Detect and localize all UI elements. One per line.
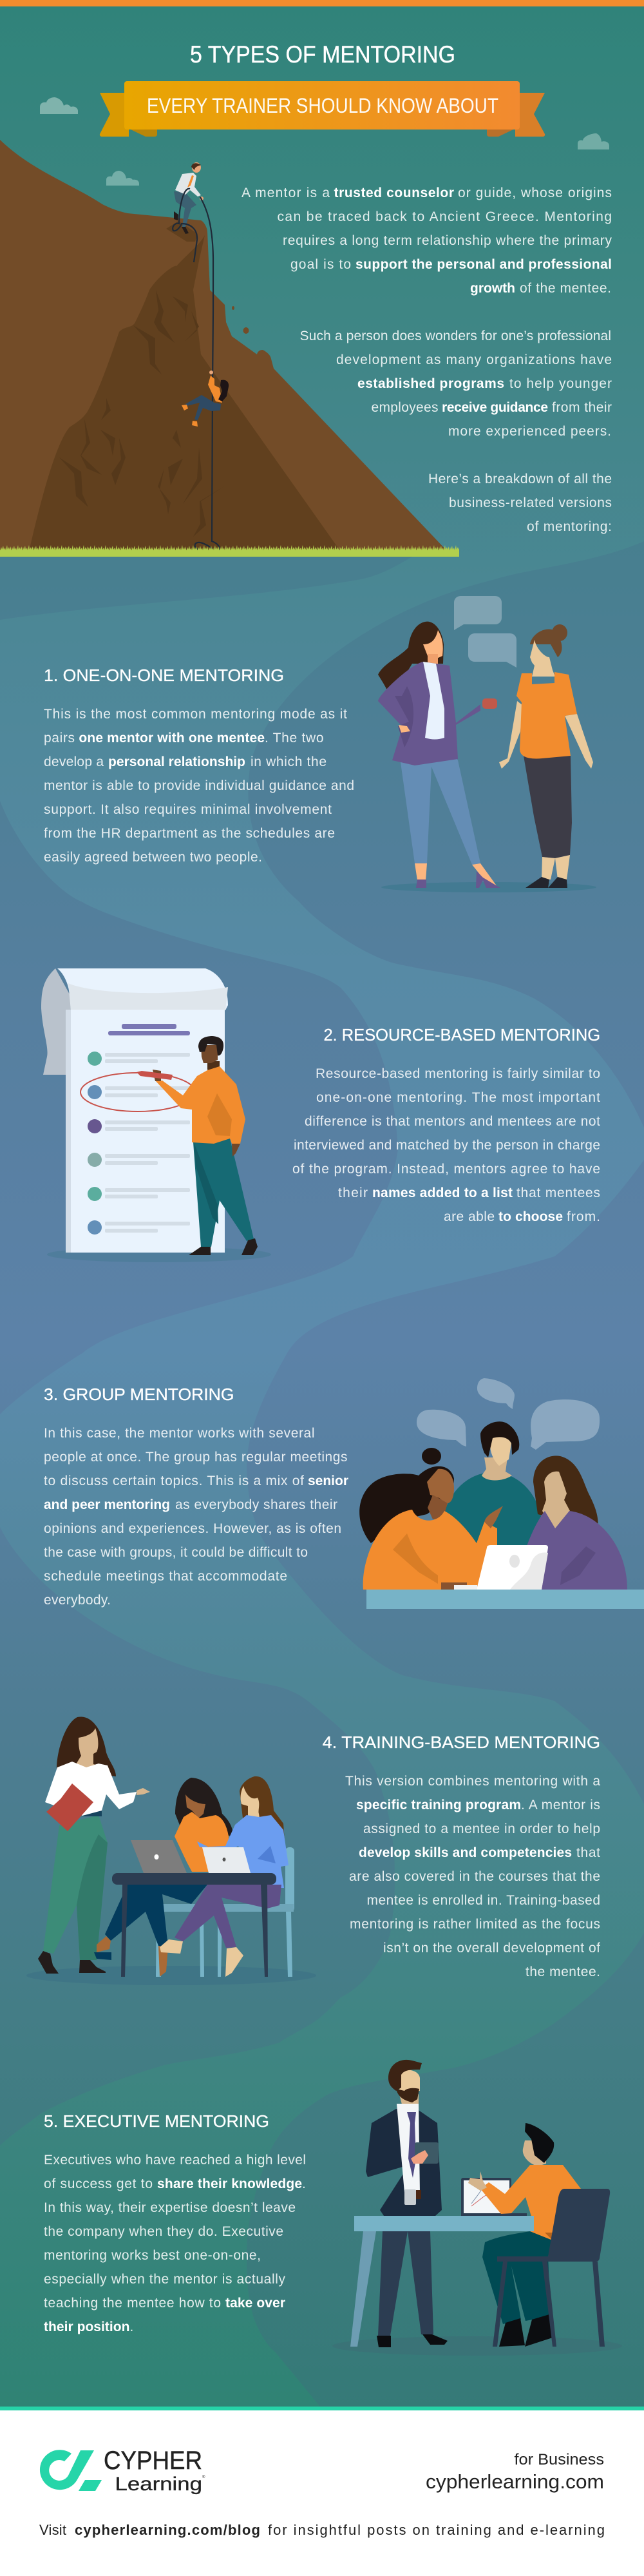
intro text: requires a long term relationship where the primary [283, 233, 612, 248]
cloud icon right [578, 133, 609, 149]
section 1 text [44, 707, 354, 865]
section 3 text: people at once. The group has regular meetings [44, 1450, 348, 1465]
section 3 text: and peer mentoring [44, 1497, 170, 1512]
illustration: list and man with marker [41, 968, 271, 1262]
illustration: cliff with climbers [0, 140, 448, 555]
paper sheet [66, 1010, 225, 1253]
section 1 text: . The two [265, 731, 323, 745]
section 3 text: opinions and experiences. However, as is often [44, 1521, 341, 1536]
intro text: growth [470, 281, 515, 296]
intro text: of the mentee. [520, 281, 611, 296]
website: cypherlearning.com [426, 2470, 604, 2493]
blog line: for insightful posts on training and e-learning [268, 2522, 605, 2538]
ground shadow [47, 1247, 271, 1262]
section 4 text: the mentee. [526, 1965, 600, 1979]
intro text: development as many organizations have [336, 352, 612, 367]
main rope [193, 197, 220, 555]
laptop [454, 1545, 548, 1590]
logo wordmark: ® [202, 2475, 205, 2479]
title: 5 TYPES OF MENTORING [190, 41, 455, 68]
speech bubble 1 [454, 596, 502, 630]
section 3 text: In this case, the mentor works with several [44, 1426, 314, 1441]
section 1 text: support. It also requires minimal involvement [44, 802, 332, 817]
mentor figure [174, 162, 204, 234]
ribbon banner [100, 81, 545, 137]
woman in orange [499, 624, 593, 888]
section 2 text: their [338, 1186, 368, 1200]
section 5 text: In this way, their expertise doesn’t leave [44, 2200, 296, 2215]
grass [0, 545, 459, 557]
section 2 text: Resource-based mentoring is fairly similar to [316, 1066, 600, 1081]
intro text: A mentor is a [242, 186, 330, 200]
top orange bar [0, 0, 644, 6]
woman in purple [515, 1456, 627, 1590]
intro text: of mentoring: [527, 519, 612, 534]
grey laptop [131, 1840, 187, 1873]
section 1 text: from the HR department as the schedules are [44, 826, 335, 841]
section 4 text: mentee is enrolled in. Training-based [367, 1893, 600, 1908]
woman with cup [378, 622, 500, 888]
section 1 text: pairs [44, 731, 75, 745]
standing executive [366, 2060, 448, 2347]
section 2 text: interviewed and matched by the person in charge [294, 1138, 600, 1153]
section 3 text [44, 1426, 348, 1608]
section 3 text: the case with groups, it could be difficult to [44, 1545, 308, 1560]
intro text: business-related versions [449, 495, 612, 510]
section 4 text: This version combines mentoring with a [345, 1774, 600, 1789]
section 1 text: develop a [44, 755, 104, 769]
section 1 text: in which the [251, 755, 327, 769]
section 4 heading: 4. TRAINING-BASED MENTORING [323, 1733, 600, 1752]
climbing woman [182, 370, 229, 427]
mountain shadow [29, 235, 341, 552]
section 2 text: that mentees [516, 1186, 600, 1200]
ground shadow [381, 882, 596, 892]
section 1 text: personal relationship [108, 755, 245, 769]
speech bubble 2 [468, 633, 516, 668]
section 2 text: one-on-one mentoring. The most important [316, 1090, 600, 1105]
section 5 text: share their knowledge [157, 2177, 302, 2191]
section 5 text: their position [44, 2320, 130, 2334]
table [366, 1590, 644, 1609]
ground shadow [26, 1966, 316, 1985]
section 2 text: to choose [498, 1209, 563, 1224]
section 4 text: specific training program [356, 1798, 521, 1812]
section 5 text: Executives who have reached a high level [44, 2153, 306, 2167]
speech bubble top [477, 1378, 515, 1409]
section 5 heading: 5. EXECUTIVE MENTORING [44, 2111, 269, 2131]
illustration: group of three [359, 1378, 644, 1609]
section 1 text: This is the most common mentoring mode as it [44, 707, 347, 722]
speech bubble right [531, 1399, 600, 1450]
section 3 text: as everybody shares their [175, 1497, 337, 1512]
section 4 text: are also covered in the courses that the [349, 1869, 600, 1884]
logo wordmark: Learning [115, 2474, 202, 2495]
section 5 text: teaching the mentee how to [44, 2296, 221, 2311]
woman in orange top [94, 1778, 233, 1977]
section 2 heading: 2. RESOURCE-BASED MENTORING [323, 1025, 600, 1044]
chair [156, 1847, 294, 1977]
rock cracks [59, 290, 224, 537]
section 5 text: mentoring works best one-on-one, [44, 2248, 261, 2263]
section 4 text: . A mentor is [521, 1798, 600, 1812]
blog line: cypherlearning.com/blog [75, 2522, 260, 2538]
intro text: Here’s a breakdown of all the [428, 472, 612, 486]
section 1 text: mentor is able to provide individual guidance and [44, 778, 354, 793]
section 3 text: everybody. [44, 1593, 111, 1608]
chair [493, 2189, 610, 2347]
section 5 text [44, 2153, 306, 2334]
mountain [0, 140, 448, 552]
intro text: employees [371, 400, 438, 415]
section 3 heading: 3. GROUP MENTORING [44, 1385, 234, 1404]
section 1 heading: 1. ONE-ON-ONE MENTORING [44, 666, 284, 685]
figure shadow [166, 221, 198, 242]
ground shadow [332, 2336, 622, 2356]
footer [0, 2407, 644, 2576]
intro text: support the personal and professional [355, 257, 612, 272]
speech bubble left [417, 1410, 466, 1447]
logo icon [40, 2450, 102, 2491]
list heading bars [122, 1024, 176, 1029]
section 3 text: senior [308, 1474, 348, 1488]
illustration: training at a table [26, 1716, 316, 1985]
section 2 text [292, 1066, 600, 1224]
section 5 text: . [130, 2320, 133, 2334]
section 4 text: mentoring is rather limited as the focus [350, 1917, 600, 1932]
blog line: Visit [39, 2522, 66, 2538]
loose rocks [232, 306, 234, 310]
intro text: from their [552, 400, 612, 415]
section 5 text: . [302, 2177, 306, 2191]
intro text: or guide, whose origins [458, 186, 612, 200]
list rows [88, 1052, 190, 1235]
intro text: trusted counselor [334, 186, 454, 200]
intro text: more experienced peers. [448, 424, 611, 439]
section 4 text: that [576, 1845, 600, 1860]
section 4 text: develop skills and competencies [359, 1845, 572, 1860]
illustration: two women talking [378, 596, 596, 892]
section 4 text: assigned to a mentee in order to help [363, 1821, 600, 1836]
laptop with chart [461, 2178, 527, 2216]
intro text: Such a person does wonders for one’s professional [300, 329, 611, 343]
seated mentee [468, 2123, 581, 2347]
intro text: can be traced back to Ancient Greece. Mentoring [277, 209, 612, 224]
paper curl [41, 968, 71, 1075]
section 2 text: are able [444, 1209, 495, 1224]
woman in blue top [160, 1776, 289, 1977]
intro text: goal is to [290, 257, 351, 272]
section 1 text: easily agreed between two people. [44, 850, 262, 865]
section 5 text: take over [225, 2296, 285, 2311]
intro text: receive guidance [442, 400, 548, 415]
section 3 text: schedule meetings that accommodate [44, 1569, 287, 1584]
illustration: executive and mentee at table [332, 2060, 622, 2356]
man at back [442, 1421, 542, 1590]
intro text: established programs [357, 376, 504, 391]
section 3 text: to discuss certain topics. This is a mix of [44, 1474, 304, 1488]
paper roll top [57, 968, 228, 1010]
section 2 text: difference is that mentors and mentees are not [305, 1114, 600, 1129]
man with marker [137, 1036, 258, 1255]
section 1 text: one mentor with one mentee [79, 731, 265, 745]
table [350, 2216, 534, 2347]
section 5 text: the company when they do. Executive [44, 2224, 283, 2239]
section 2 text: names added to a list [372, 1186, 513, 1200]
section 5 text: of success get to [44, 2177, 153, 2191]
for business: for Business [514, 2451, 604, 2468]
section 2 text: of the program. Instead, mentors agree to have [292, 1162, 600, 1177]
cloud icon middle [106, 171, 139, 186]
logo wordmark [104, 2446, 205, 2495]
cloud icon left [40, 97, 78, 114]
coiled rope [173, 189, 197, 262]
section 4 text: isn’t on the overall development of [383, 1941, 600, 1956]
section 5 text: especially when the mentor is actually [44, 2272, 286, 2287]
intro text [242, 186, 612, 534]
standing woman [38, 1716, 150, 1974]
intro text: to help younger [509, 376, 612, 391]
ribbon text: EVERY TRAINER SHOULD KNOW ABOUT [147, 94, 498, 117]
section 2 text: from. [567, 1209, 600, 1224]
woman in orange [359, 1448, 503, 1590]
table [112, 1873, 276, 1977]
light laptop [202, 1847, 251, 1873]
red circle mark [80, 1073, 195, 1111]
logo wordmark: CYPHER [104, 2446, 202, 2475]
section 4 text [345, 1774, 600, 1979]
